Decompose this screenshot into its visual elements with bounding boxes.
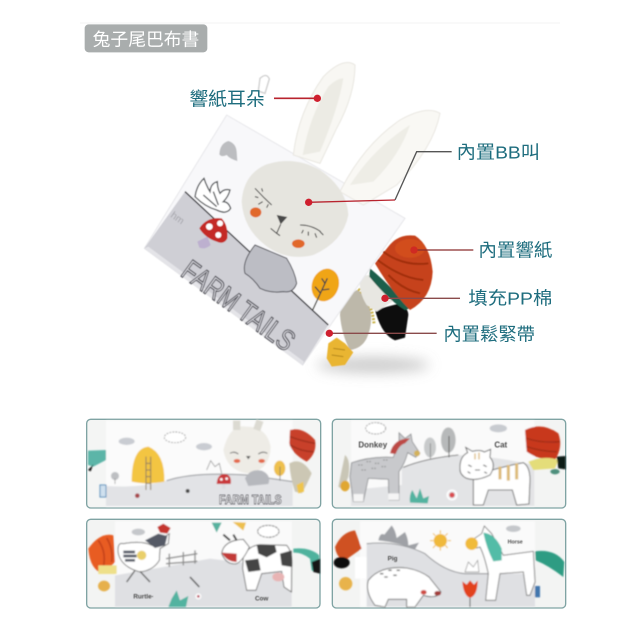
thumbnail text: rooster caption: Rurtle· [133, 594, 154, 601]
callout: 內置BB叫: 內置BB叫 [457, 143, 540, 163]
book cover [144, 115, 405, 365]
rabbit body [244, 245, 297, 292]
callout: 內置響紙 [410, 241, 552, 261]
thumbnail text: Pig: Pig [388, 555, 398, 562]
book art: tree [307, 265, 344, 310]
rabbit ears [293, 63, 440, 205]
book art: tiny word: hm [168, 210, 186, 227]
rabbit head [242, 161, 348, 257]
callout: 內置鬆緊帶 [326, 324, 535, 345]
thumbnail text: FARM TAILS [219, 493, 282, 507]
title tag [85, 24, 207, 52]
panel: donkey and cat spread [332, 419, 566, 508]
callout: 響紙耳朵: 響紙耳朵 [189, 89, 265, 110]
title tag: 兔子尾巴布書 [93, 30, 199, 50]
callout: 內置BB叫 [305, 143, 540, 206]
book art: mushroom [197, 218, 227, 248]
callout: 內置鬆緊帶: 內置鬆緊帶 [443, 324, 535, 345]
book art: text FARM TAILS: FARM TAILS [175, 254, 301, 358]
panel: pig and horse spread [332, 519, 566, 608]
book art: cloud [219, 141, 237, 161]
panel: rooster and cow spread [87, 519, 320, 608]
callout: 響紙耳朵 [189, 89, 321, 110]
book art: plant [195, 178, 231, 212]
thumbnail text: Cat: Cat [494, 441, 508, 450]
thumbnail text: Horse: Horse [508, 540, 523, 546]
panel: cover spread [87, 419, 321, 508]
thumbnail text: Cow: Cow [255, 595, 268, 602]
thumbnail text: Donkey: Donkey [358, 441, 388, 450]
callout: 填充PP棉: 填充PP棉 [468, 288, 552, 308]
callout: 填充PP棉 [381, 288, 552, 308]
rattle tail toy [327, 235, 433, 367]
callout: 內置響紙: 內置響紙 [478, 241, 552, 261]
illustration: rabbit cloth book [144, 63, 440, 373]
